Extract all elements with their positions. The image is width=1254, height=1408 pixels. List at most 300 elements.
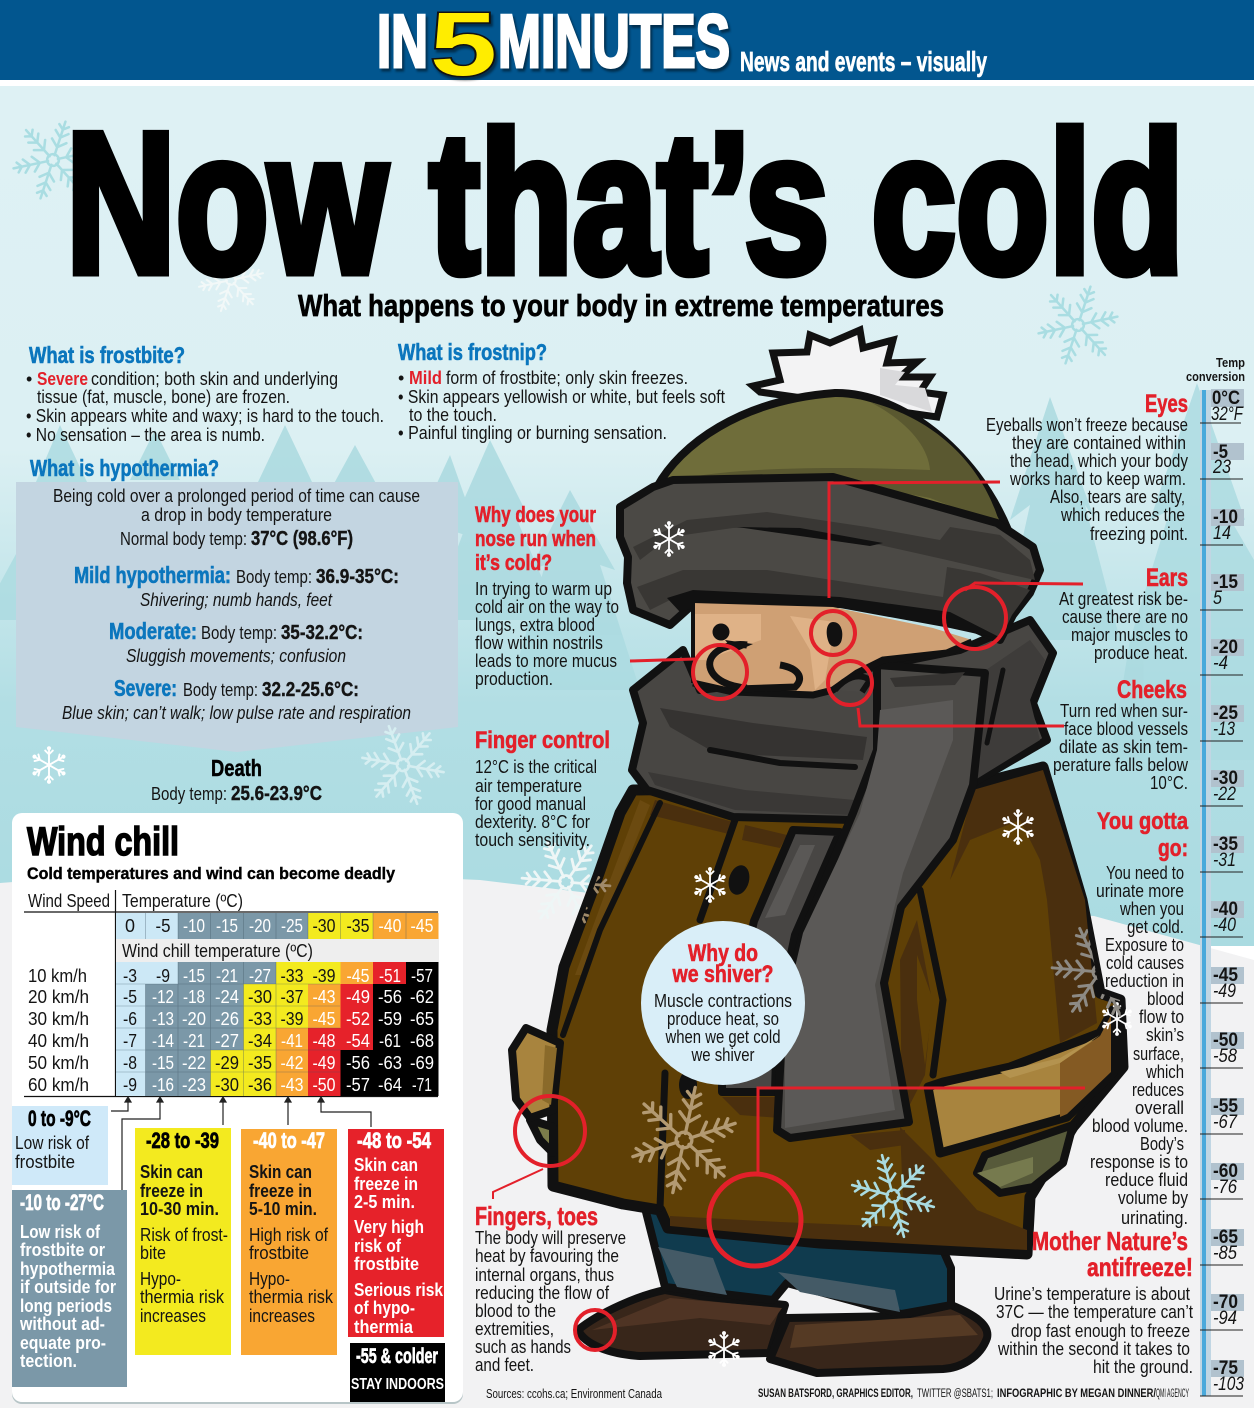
legend: -48 to -54: frostbite <box>354 1254 419 1274</box>
row: 60 km/h: -71 <box>412 1075 432 1095</box>
legend: -28 to -39 <box>135 1128 231 1355</box>
legend: -10 to -27: without ad- <box>19 1314 105 1334</box>
text block: what is frostnip: to the touch. <box>409 405 497 425</box>
temperature header row: -40 <box>378 916 402 936</box>
row: 50 km/h: -69 <box>410 1053 434 1073</box>
face <box>693 603 972 695</box>
text block: finger control: air temperature <box>475 776 582 796</box>
temperature conversion scale: -94 <box>1213 1308 1237 1329</box>
text block: why does your nose run: cold air on the way to <box>475 597 619 617</box>
text block: what is frostbite: Severe <box>37 369 88 389</box>
temperature header row: -45 <box>410 916 434 936</box>
text block: you gotta go: blood volume. <box>1092 1116 1188 1136</box>
text block: why does your nose run: nose run when <box>475 526 596 551</box>
callout circle: why do we shiver: produce heat, so <box>667 1009 779 1029</box>
temperature conversion scale: -60 <box>1213 1161 1238 1182</box>
panel: what is hypothermia <box>16 455 458 752</box>
right boot <box>770 1305 987 1373</box>
text block: finger control: for good manual <box>475 794 586 814</box>
text block: what is frostbite <box>26 342 384 445</box>
legend: -40 to -47: 5-10 min. <box>249 1199 317 1219</box>
temperature conversion scale: -58 <box>1213 1046 1237 1067</box>
mouth <box>737 665 800 689</box>
legend: -40 to -47 <box>241 1128 337 1355</box>
row: 30 km/h: -20 <box>182 1009 206 1029</box>
wind chill table: Wind chill temperature (ºC) <box>122 941 313 961</box>
text block: you gotta go: when you <box>1119 899 1184 919</box>
text block: what is frostbite: • No sensation – the area is numb. <box>26 425 265 445</box>
temperature conversion scale: -85 <box>1213 1243 1237 1264</box>
legend: -48 to -54: Skin can <box>354 1155 418 1175</box>
legend: -10 to -27: -10 to -27°C <box>20 1190 104 1215</box>
text block: finger control: touch sensitivity. <box>475 830 590 850</box>
stage: mild hypothermia: 36.9-35°C: <box>316 566 399 588</box>
text block: cheeks <box>1053 676 1189 793</box>
row: 10 km/h: -51 <box>379 966 401 986</box>
legend: -10 to -27: hypothermia <box>20 1259 116 1279</box>
temperature header row: -10 <box>183 916 205 936</box>
callout circle: why do we shiver: Muscle contractions <box>654 991 792 1011</box>
row: 40 km/h: -21 <box>183 1031 205 1051</box>
tagline: News and events – visually <box>740 46 987 77</box>
left eye <box>712 624 730 640</box>
row: 10 km/h: -33 <box>280 966 304 986</box>
coat button <box>725 863 753 897</box>
text block: fingers, toes: Fingers, toes <box>475 1201 598 1231</box>
credits: SUSAN BATSFORD, GRAPHICS EDITOR, <box>758 1388 913 1400</box>
temperature conversion scale: 14 <box>1213 523 1231 544</box>
second scarf tail <box>722 830 840 1118</box>
background sky <box>0 86 1254 946</box>
row: 40 km/h: 40 km/h <box>28 1031 89 1051</box>
wind chill subheading: Cold temperatures and wind can become deadly <box>27 864 396 883</box>
logo wordmark: MINUTES <box>498 0 730 83</box>
background snow ground <box>0 868 1254 1408</box>
row: 20 km/h: -62 <box>410 987 434 1007</box>
text block: what is frostnip: form of frostbite; only skin freezes. <box>446 368 688 388</box>
row: 50 km/h: -22 <box>182 1053 206 1073</box>
legend: -28 to -39: Hypo- <box>140 1269 181 1289</box>
temperature conversion scale: 32°F <box>1211 404 1244 425</box>
red callout rings and leader lines <box>493 482 1085 1350</box>
text block: what is frostnip: • <box>398 368 404 388</box>
legend: -28 to -39: freeze in <box>140 1181 203 1201</box>
temperature conversion scale: -25 <box>1213 703 1238 724</box>
row: 40 km/h: -48 <box>312 1031 336 1051</box>
arrows: legend to table <box>111 1097 371 1190</box>
row: 60 km/h: -43 <box>280 1075 304 1095</box>
stage: severe: Blue skin; can’t walk; low pulse rate and respiration <box>62 703 411 723</box>
legend: 0 to -9: Low risk of <box>15 1133 90 1153</box>
row: 10 km/h: -15 <box>183 966 205 986</box>
logo wordmark <box>377 0 730 95</box>
text block: ears: Ears <box>1146 564 1188 592</box>
temperature conversion scale: -30 <box>1213 768 1238 789</box>
row: 40 km/h <box>28 1031 434 1051</box>
text block: mother nature's antifreeze <box>994 1226 1193 1377</box>
text block: what is frostbite: What is frostbite? <box>29 342 185 368</box>
text block: cheeks: 10°C. <box>1150 773 1188 793</box>
text block: you gotta go: volume by <box>1118 1188 1188 1208</box>
text block: cheeks: perature falls below <box>1053 755 1189 775</box>
text block: what is frostnip: What is frostnip? <box>398 339 547 365</box>
nose <box>710 645 747 688</box>
text block: you gotta go: flow to <box>1139 1007 1184 1027</box>
hat crown <box>657 393 1008 530</box>
temperature conversion scale: -22 <box>1213 784 1236 805</box>
row: 40 km/h: -41 <box>281 1031 303 1051</box>
wind chill table <box>24 890 439 1096</box>
text block: mother nature's antifreeze: drop fast enough to freeze <box>1011 1321 1190 1341</box>
text block: fingers, toes <box>475 1201 626 1375</box>
background trees <box>0 383 1254 760</box>
coat <box>552 767 1123 1254</box>
panel: what is hypothermia: a drop in body temperature <box>141 505 332 525</box>
subtitle: What happens to your body in extreme temperatures <box>298 288 944 323</box>
text block: mother nature's antifreeze: within the second it takes to <box>997 1339 1190 1359</box>
text block: you gotta go: Body’s <box>1140 1134 1184 1154</box>
row: 10 km/h: 10 km/h <box>28 966 87 986</box>
row: 60 km/h: -36 <box>248 1075 272 1095</box>
stage: mild hypothermia: Body temp: <box>236 567 312 587</box>
panel: what is hypothermia: Being cold over a prolonged period of time can cause <box>53 486 420 506</box>
legend: -40 to -47: increases <box>249 1306 315 1326</box>
text block: eyes: freezing point. <box>1090 524 1188 544</box>
text block: eyes: Eyes <box>1145 390 1188 418</box>
temperature conversion scale: -15 <box>1213 572 1238 593</box>
row: 60 km/h <box>28 1075 432 1095</box>
row: 10 km/h: -45 <box>346 966 370 986</box>
text block: fingers, toes: internal organs, thus <box>475 1265 614 1285</box>
callout circle: why do we shiver <box>641 921 805 1085</box>
main scarf tail <box>777 665 985 1138</box>
temperature conversion scale: -35 <box>1213 834 1238 855</box>
text block: what is frostnip: Mild <box>409 368 442 388</box>
text block: ears: produce heat. <box>1094 643 1188 663</box>
credits: INFOGRAPHIC BY MEGAN DINNER/ <box>997 1388 1157 1400</box>
temperature conversion scale: -75 <box>1213 1358 1238 1379</box>
stage: moderate: 35-32.2°C: <box>281 622 363 644</box>
temperature conversion scale: -31 <box>1213 850 1236 871</box>
text block: what is frostbite: • <box>26 369 32 389</box>
legend: -40 to -47: High risk of <box>249 1225 329 1245</box>
legend: -10 to -27: frostbite or <box>20 1240 105 1260</box>
text block: ears: At greatest risk be- <box>1059 589 1188 609</box>
snowflake behind coat <box>506 822 626 942</box>
wind chill heading: Wind chill <box>27 820 179 864</box>
row: 50 km/h: -35 <box>248 1053 272 1073</box>
legend: -55 and colder: -55 & colder <box>356 1345 438 1368</box>
row: 40 km/h: -27 <box>215 1031 239 1051</box>
row: 30 km/h: -45 <box>312 1009 336 1029</box>
text block: fingers, toes: reducing the flow of <box>475 1283 610 1303</box>
text block: you gotta go: surface, <box>1133 1044 1184 1064</box>
legend: -48 to -54 <box>348 1128 444 1337</box>
snowflakes behind title <box>4 110 1127 375</box>
text block: why does your nose run: In trying to warm up <box>475 579 612 599</box>
legend: -48 to -54: -48 to -54 <box>357 1128 432 1153</box>
row: 10 km/h: -21 <box>216 966 238 986</box>
header banner <box>0 0 1254 95</box>
legend: -40 to -47: Skin can <box>249 1162 312 1182</box>
stage: severe: 32.2-25.6°C: <box>262 679 359 701</box>
text block: fingers, toes: The body will preserve <box>475 1228 626 1248</box>
legend: -10 to -27: Low risk of <box>20 1222 101 1242</box>
row: 50 km/h: -15 <box>152 1053 174 1073</box>
callout circle: why do we shiver: we shiver? <box>672 961 774 988</box>
text block: ears: cause there are no <box>1062 607 1188 627</box>
text block: you gotta go: skin’s <box>1146 1025 1184 1045</box>
callout circle: why do we shiver: when we get cold <box>665 1027 780 1047</box>
row: 30 km/h: -6 <box>123 1009 137 1029</box>
text block: eyes: which reduces the <box>1060 505 1185 525</box>
temperature conversion scale: -70 <box>1213 1292 1238 1313</box>
text block: you gotta go <box>1090 808 1189 1228</box>
text block: what is frostnip: • Painful tingling or burning sensation. <box>398 423 667 443</box>
temperature conversion scale: 5 <box>1213 588 1222 609</box>
text block: fingers, toes: extremities, <box>475 1319 554 1339</box>
text block: you gotta go: You need to <box>1106 863 1184 883</box>
text block: eyes: Eyeballs won’t freeze because <box>986 415 1188 435</box>
row: 60 km/h: -9 <box>123 1075 137 1095</box>
row: 20 km/h: -49 <box>346 987 370 1007</box>
temperature conversion scale: -50 <box>1213 1030 1238 1051</box>
row: 20 km/h: -30 <box>248 987 272 1007</box>
row: 20 km/h: -24 <box>215 987 239 1007</box>
row: 10 km/h <box>28 966 433 986</box>
row: 50 km/h: -42 <box>280 1053 304 1073</box>
legend: -48 to -54: freeze in <box>354 1174 418 1194</box>
text block: why does your nose run: it’s cold? <box>475 550 552 575</box>
row: 30 km/h: -52 <box>346 1009 370 1029</box>
text: QMI AGENCY <box>1156 1388 1189 1400</box>
left boot <box>578 1290 785 1356</box>
text block: why does your nose run: leads to more mucus <box>475 651 617 671</box>
row: 30 km/h: -59 <box>378 1009 402 1029</box>
legend: -10 to -27: tection. <box>20 1351 77 1371</box>
temperature header row: -15 <box>216 916 238 936</box>
stage: death <box>151 755 322 805</box>
temperature conversion scale: -103 <box>1213 1374 1244 1395</box>
text block: what is frostbite: condition; both skin and underlying <box>91 369 338 389</box>
text block: fingers, toes: heat by favouring the <box>475 1246 619 1266</box>
legend: -40 to -47: frostbite <box>249 1243 309 1263</box>
row: 40 km/h: -61 <box>379 1031 401 1051</box>
text block: you gotta go: urinating. <box>1121 1208 1188 1228</box>
text block: you gotta go: go: <box>1158 835 1188 862</box>
text block: mother nature's antifreeze: Mother Nature’s <box>1032 1226 1188 1256</box>
row: 20 km/h: -37 <box>280 987 304 1007</box>
text block: you gotta go: overall <box>1135 1098 1184 1118</box>
row: 60 km/h: 60 km/h <box>28 1075 89 1095</box>
panel: wind chill <box>12 813 463 1404</box>
right cuff <box>928 1010 1113 1153</box>
text block: fingers, toes: and feet. <box>475 1355 534 1375</box>
text block: what is frostnip <box>398 339 725 443</box>
text block: why does your nose run <box>475 502 619 689</box>
text block: mother nature's antifreeze: antifreeze! <box>1087 1252 1193 1282</box>
row: 60 km/h: -50 <box>312 1075 336 1095</box>
hat roll band <box>620 477 1040 640</box>
text block: mother nature's antifreeze: Urine’s temperature is about <box>994 1284 1190 1304</box>
row: 20 km/h: -56 <box>378 987 402 1007</box>
legend: -10 to -27 <box>12 1190 127 1387</box>
panel: what is hypothermia: 37°C (98.6°F) <box>251 528 353 550</box>
legend: -10 to -27: long periods <box>20 1296 112 1316</box>
row: 60 km/h: -23 <box>182 1075 206 1095</box>
text block: fingers, toes: such as hands <box>475 1337 571 1357</box>
legend: -28 to -39: increases <box>140 1306 206 1326</box>
row: 50 km/h: 50 km/h <box>28 1053 89 1073</box>
text block: eyes: Also, tears are salty, <box>1050 487 1185 507</box>
right eye <box>827 622 842 647</box>
stage: mild hypothermia: Mild hypothermia: <box>74 562 231 588</box>
text block: why does your nose run: flow within nostrils <box>475 633 603 653</box>
stage: moderate: Moderate: <box>109 618 197 644</box>
text block: cheeks: face blood vessels <box>1064 719 1188 739</box>
text block: finger control <box>475 727 610 850</box>
text block: you gotta go: reduction in <box>1105 971 1184 991</box>
legend: 0 to -9: 0 to -9°C <box>28 1106 91 1131</box>
row: 20 km/h: -12 <box>152 987 174 1007</box>
trousers <box>645 1208 951 1314</box>
text block: cheeks: dilate as skin tem- <box>1059 737 1188 757</box>
stage: severe <box>62 675 411 723</box>
temperature header row: -35 <box>346 916 370 936</box>
legend: -28 to -39: bite <box>140 1243 166 1263</box>
row: 50 km/h: -49 <box>312 1053 336 1073</box>
legend: -55 and colder: STAY INDOORS <box>351 1376 444 1393</box>
stage: death: 25.6-23.9°C <box>231 783 322 805</box>
temperature conversion scale: 0°C <box>1212 388 1240 409</box>
temperature conversion scale: Temp <box>1216 356 1245 370</box>
legend: 0 to -9 <box>12 1106 108 1185</box>
snowflakes on character <box>506 522 1165 1366</box>
stage: moderate: Body temp: <box>201 623 277 643</box>
text block: what is frostbite: tissue (fat, muscle, bone) are frozen. <box>37 387 290 407</box>
temperature conversion scale: -67 <box>1213 1112 1238 1133</box>
text block: why does your nose run: Why does your <box>475 502 596 527</box>
text block: you gotta go: which <box>1145 1062 1184 1082</box>
panel: what is hypothermia: Normal body temp: <box>120 529 247 549</box>
row: 50 km/h: -56 <box>346 1053 370 1073</box>
legend: -28 to -39: Risk of frost- <box>140 1225 228 1245</box>
legend: -40 to -47: Hypo- <box>249 1269 290 1289</box>
text block: eyes: they are contained within <box>1012 433 1186 453</box>
scarf neck wrap <box>632 620 1053 820</box>
stage: moderate <box>109 618 363 666</box>
row: 50 km/h: -29 <box>215 1053 239 1073</box>
text block: eyes: the head, which your body <box>1010 451 1188 471</box>
credits <box>486 1387 1189 1401</box>
temperature conversion scale: -40 <box>1213 899 1238 920</box>
temperature header row: -30 <box>312 916 336 936</box>
wind chill table: Temperature (ºC) <box>122 891 243 911</box>
text block: you gotta go: You gotta <box>1097 808 1189 835</box>
temperature conversion scale: conversion <box>1186 370 1245 384</box>
legend: -48 to -54: of hypo- <box>354 1298 415 1318</box>
text block: why does your nose run: lungs, extra blood <box>475 615 595 635</box>
legend: -40 to -47: -40 to -47 <box>253 1128 325 1153</box>
credits: Sources: ccohs.ca; Environment Canada <box>486 1387 662 1401</box>
temperature conversion scale: -76 <box>1213 1177 1237 1198</box>
pompom <box>753 330 943 417</box>
legend: -28 to -39: thermia risk <box>140 1287 225 1307</box>
row: 20 km/h: 20 km/h <box>28 987 89 1007</box>
row: 10 km/h: -9 <box>156 966 170 986</box>
left mitten <box>530 1120 553 1153</box>
snowflakes by death label <box>32 708 460 822</box>
text block: what is frostbite: • Skin appears white and waxy; is hard to the touch. <box>26 406 384 426</box>
coat button <box>679 1071 697 1099</box>
text block: you gotta go: get cold. <box>1127 917 1184 937</box>
row: 10 km/h: -57 <box>411 966 433 986</box>
temperature header row <box>125 916 434 936</box>
stage: mild hypothermia <box>74 562 399 610</box>
legend: -48 to -54: Very high <box>354 1217 424 1237</box>
text block: you gotta go: Exposure to <box>1105 935 1184 955</box>
row: 20 km/h: -18 <box>183 987 205 1007</box>
row: 60 km/h: -64 <box>378 1075 402 1095</box>
callout circle: why do we shiver: we shiver <box>691 1045 754 1065</box>
row: 30 km/h: -33 <box>248 1009 272 1029</box>
row: 50 km/h: -63 <box>378 1053 402 1073</box>
temperature header row: 0 <box>125 916 135 936</box>
stage: severe: Body temp: <box>183 680 258 700</box>
legend: -55 and colder <box>350 1343 445 1402</box>
text block: cheeks: Cheeks <box>1117 676 1187 704</box>
right mitten <box>977 1125 1073 1193</box>
legend: -28 to -39: -28 to -39 <box>146 1128 219 1153</box>
text block: you gotta go: blood <box>1147 989 1184 1009</box>
legend: -48 to -54: risk of <box>354 1236 402 1256</box>
row: 40 km/h: -34 <box>248 1031 272 1051</box>
text block: mother nature's antifreeze: hit the ground. <box>1093 1357 1193 1377</box>
legend: -10 to -27: equate pro- <box>20 1333 106 1353</box>
stage: mild hypothermia: Shivering; numb hands, feet <box>140 590 333 610</box>
legend: -10 to -27: if outside for <box>20 1277 116 1297</box>
temperature conversion scale: -65 <box>1213 1227 1238 1248</box>
left cuff <box>512 1028 560 1118</box>
text block: ears: major muscles to <box>1071 625 1188 645</box>
temperature header row: -20 <box>249 916 271 936</box>
row: 20 km/h: -5 <box>123 987 137 1007</box>
row: 20 km/h: -43 <box>312 987 336 1007</box>
row: 50 km/h <box>28 1053 434 1073</box>
legend: -48 to -54: thermia <box>354 1317 414 1337</box>
text block: fingers, toes: blood to the <box>475 1301 556 1321</box>
row: 20 km/h <box>28 987 434 1007</box>
text block: what is frostnip: • Skin appears yellowish or white, but feels soft <box>398 387 725 407</box>
stage: severe: Severe: <box>114 675 177 701</box>
temperature conversion scale: -55 <box>1213 1096 1238 1117</box>
text block: why does your nose run: production. <box>475 669 553 689</box>
row: 40 km/h: -7 <box>123 1031 137 1051</box>
row: 10 km/h: -27 <box>249 966 271 986</box>
text block: you gotta go: reduces <box>1132 1080 1184 1100</box>
text block: you gotta go: urinate more <box>1096 881 1184 901</box>
wind chill table: Wind Speed <box>28 891 110 911</box>
text block: finger control: 12°C is the critical <box>475 757 597 777</box>
row: 40 km/h: -14 <box>152 1031 174 1051</box>
row: 60 km/h: -16 <box>152 1075 174 1095</box>
row: 30 km/h: -65 <box>410 1009 434 1029</box>
row: 40 km/h: -54 <box>346 1031 370 1051</box>
stage: death: Body temp: <box>151 784 227 804</box>
row: 60 km/h: -57 <box>346 1075 370 1095</box>
legend: -40 to -47: thermia risk <box>249 1287 334 1307</box>
row: 30 km/h: -13 <box>152 1009 174 1029</box>
